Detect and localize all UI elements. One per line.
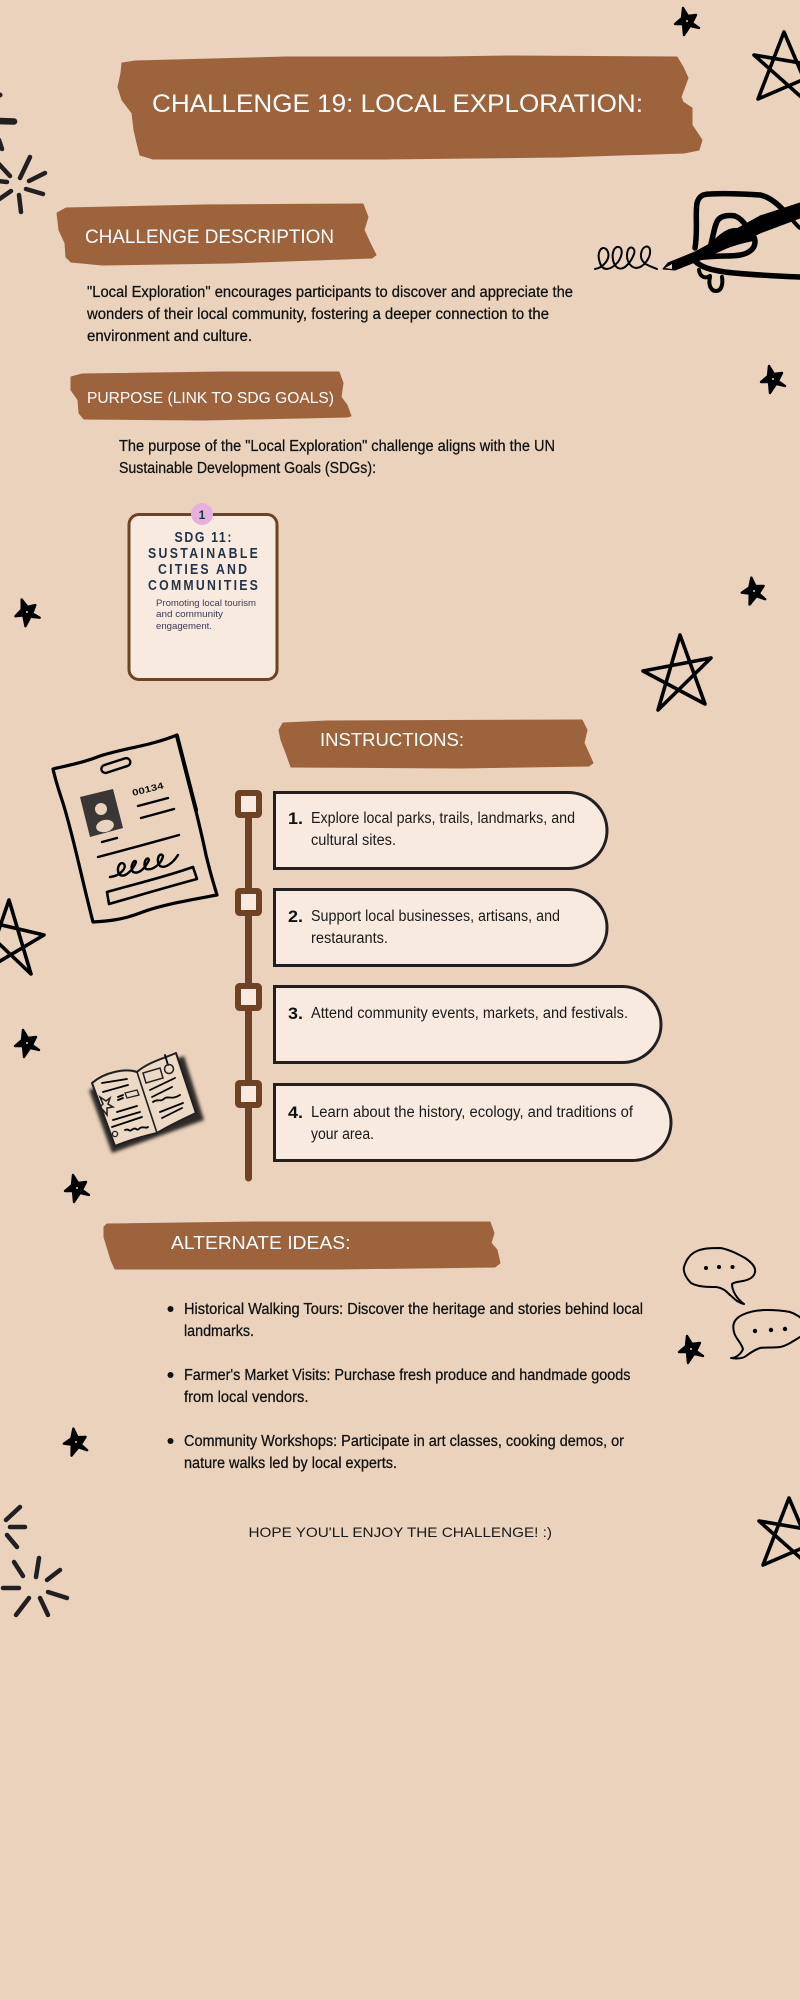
step 4: 4.: [288, 1103, 303, 1122]
icon: small star 8: [63, 1428, 89, 1457]
purpose banner: [71, 372, 351, 420]
icon: speech bubble 1: [684, 1248, 755, 1304]
idea 2: [168, 1367, 631, 1406]
badge number: [191, 503, 213, 525]
step 2: restaurants.: [311, 930, 388, 947]
badge number: 1: [199, 508, 206, 522]
idea 1: landmarks.: [184, 1323, 254, 1340]
step 2: 2.: [288, 907, 303, 926]
icon: outline star middle right: [643, 635, 711, 710]
card body: [129, 514, 277, 680]
icon: sunburst top left: [0, 92, 45, 212]
panel: alternate ideas: [104, 1222, 643, 1472]
idea 2: from local vendors.: [184, 1389, 308, 1406]
card text: Promoting local tourism: [156, 598, 256, 609]
instructions heading: INSTRUCTIONS:: [320, 729, 464, 750]
card heading: [148, 529, 258, 593]
panel: challenge description: [57, 204, 573, 345]
step 3: Attend community events, markets, and festivals.: [311, 1005, 628, 1022]
purpose heading: PURPOSE (LINK TO SDG GOALS): [87, 390, 334, 407]
card text: [156, 598, 256, 632]
purpose text: [119, 438, 555, 477]
icon: outline star top right: [754, 32, 800, 112]
panel: purpose: [71, 372, 555, 477]
alternate ideas heading: ALTERNATE IDEAS:: [171, 1232, 350, 1253]
title: CHALLENGE 19: LOCAL EXPLORATION:: [152, 90, 643, 118]
challenge description text: wonders of their local community, fostering a deeper connection to the: [86, 306, 549, 323]
icon: ID card: 00134: [131, 780, 165, 798]
step 1: 1.: [288, 809, 303, 828]
card text: and community: [156, 609, 223, 620]
icon: small star 7: [679, 1336, 703, 1363]
icon: open book: [89, 1053, 204, 1153]
step 1: [274, 792, 607, 868]
idea 2: Farmer's Market Visits: Purchase fresh produce and handmade goods: [184, 1367, 631, 1384]
card heading: SUSTAINABLE: [148, 545, 258, 561]
step 3: 3.: [288, 1004, 303, 1023]
step 3: [274, 986, 661, 1062]
icon: small star 2: [761, 366, 785, 393]
challenge description banner: [57, 204, 376, 265]
idea 3: [168, 1433, 624, 1472]
icon: outline star left: [0, 900, 44, 974]
step 4: your area.: [311, 1126, 374, 1143]
icon: small star 3: [14, 598, 40, 627]
panel: SDG 11 card: [129, 503, 277, 680]
icon: small star 4: [741, 577, 767, 606]
step 2: [274, 890, 607, 966]
idea 3: nature walks led by local experts.: [184, 1455, 397, 1472]
challenge description text: "Local Exploration" encourages participants to discover and appreciate the: [87, 284, 573, 301]
title banner: [118, 56, 702, 159]
step 2: Support local businesses, artisans, and: [311, 908, 560, 925]
icon: speech bubble 2: [731, 1310, 800, 1359]
idea 3: Community Workshops: Participate in art classes, cooking demos, or: [184, 1433, 624, 1450]
challenge description heading: CHALLENGE DESCRIPTION: [85, 226, 334, 248]
icon: small star 5: [15, 1030, 39, 1057]
icon: hand writing with pen: [595, 194, 800, 291]
idea 1: Historical Walking Tours: Discover the heritage and stories behind local: [184, 1301, 643, 1318]
card heading: COMMUNITIES: [148, 577, 258, 593]
icon: outline star bottom right: [759, 1498, 800, 1578]
step 1: cultural sites.: [311, 832, 396, 849]
icon: small star 1: [675, 8, 699, 35]
purpose text: Sustainable Development Goals (SDGs):: [119, 460, 376, 477]
card heading: CITIES AND: [158, 561, 247, 577]
challenge description text: environment and culture.: [87, 328, 252, 345]
closing message: HOPE YOU'LL ENJOY THE CHALLENGE! :): [248, 1524, 552, 1540]
step 4: [274, 1084, 671, 1160]
icon: ID card: [53, 735, 217, 922]
icon: sunburst bottom left: [3, 1507, 67, 1615]
step 1: Explore local parks, trails, landmarks, and: [311, 810, 575, 827]
idea 1: [168, 1301, 643, 1340]
timeline: [238, 793, 259, 1178]
card heading: SDG 11:: [174, 529, 231, 545]
step 4: Learn about the history, ecology, and traditions of: [311, 1104, 634, 1121]
instructions banner: [279, 720, 593, 768]
icon: small star 6: [65, 1175, 89, 1202]
card text: engagement.: [156, 621, 212, 632]
alternate ideas banner: [104, 1222, 500, 1269]
challenge description text: [86, 284, 573, 345]
purpose text: The purpose of the "Local Exploration" challenge aligns with the UN: [119, 438, 555, 455]
panel: instructions: [238, 720, 671, 1178]
